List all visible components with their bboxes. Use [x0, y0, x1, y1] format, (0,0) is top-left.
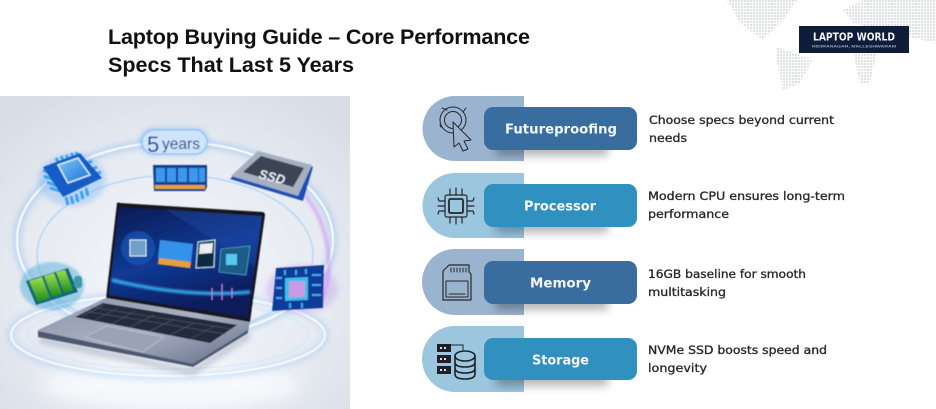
description: Storage — [648, 343, 827, 375]
pill shadow — [496, 138, 608, 156]
description: Storage: NVMe SSD boosts speed and — [648, 343, 827, 357]
description: Futureproofing: Choose specs beyond current — [649, 113, 835, 127]
pill — [484, 184, 637, 227]
description: Processor: performance — [648, 207, 729, 221]
floor reflection — [40, 361, 300, 409]
label: Processor — [524, 200, 596, 214]
icon: chip — [438, 188, 474, 224]
tab shape — [422, 326, 524, 392]
description: Processor — [648, 189, 845, 221]
icon: cursor target — [440, 107, 471, 151]
pill shadow — [496, 215, 608, 233]
icon: RAM module — [153, 165, 207, 191]
description: Futureproofing — [649, 113, 835, 145]
description: Memory: 16GB baseline for smooth — [648, 267, 806, 281]
laptop base — [38, 298, 250, 367]
logo: Laptop World: INDIRANAGAR, MALLESHWARAM — [812, 44, 897, 48]
icon: server database — [437, 344, 475, 379]
title — [108, 24, 530, 77]
laptop shadow — [40, 335, 250, 372]
icon: SSD drive: SSD — [257, 166, 287, 188]
logo: Laptop World: LAPTOP WORLD — [813, 30, 895, 44]
tab shape — [422, 249, 524, 315]
icon: memory card — [443, 265, 471, 300]
five years badge: years — [162, 136, 200, 153]
panel: Futureproofing — [423, 96, 637, 161]
description: Storage: longevity — [648, 361, 707, 375]
illustration: laptop with component ring — [0, 96, 350, 409]
tab shape — [422, 173, 524, 238]
screen glow line — [112, 280, 250, 294]
keyboard — [75, 303, 237, 343]
description: Futureproofing: needs — [649, 131, 687, 145]
pill shadow — [496, 368, 608, 386]
panel: Processor — [422, 173, 637, 238]
screen bezel — [106, 202, 265, 322]
label: Memory — [530, 276, 591, 292]
icon: CPU chip — [38, 152, 106, 206]
screen — [109, 207, 262, 318]
five years badge — [141, 129, 207, 157]
label: Futureproofing — [505, 122, 617, 138]
pill — [484, 261, 637, 304]
glow rings — [10, 142, 333, 377]
pill shadow — [496, 292, 608, 310]
icon: motherboard chip — [266, 265, 338, 313]
five years badge: 5 — [147, 132, 159, 157]
title: Specs That Last 5 Years — [108, 52, 354, 77]
icon: battery — [20, 262, 84, 310]
title: Laptop Buying Guide – Core Performance — [108, 24, 530, 49]
background world map dots — [727, 0, 936, 90]
label: Storage — [532, 354, 589, 368]
laptop — [38, 202, 265, 372]
screen icons — [121, 231, 250, 275]
pill — [484, 338, 637, 380]
description: Memory — [648, 267, 806, 299]
panel: Memory — [422, 249, 637, 315]
pill — [484, 107, 637, 150]
description: Memory: multitasking — [648, 285, 726, 299]
panel: Storage — [422, 326, 637, 392]
description: Processor: Modern CPU ensures long-term — [648, 189, 845, 203]
touchpad — [85, 326, 163, 352]
logo: Laptop World — [799, 26, 909, 53]
icon: SSD drive — [230, 151, 313, 201]
tab shape — [423, 96, 524, 161]
